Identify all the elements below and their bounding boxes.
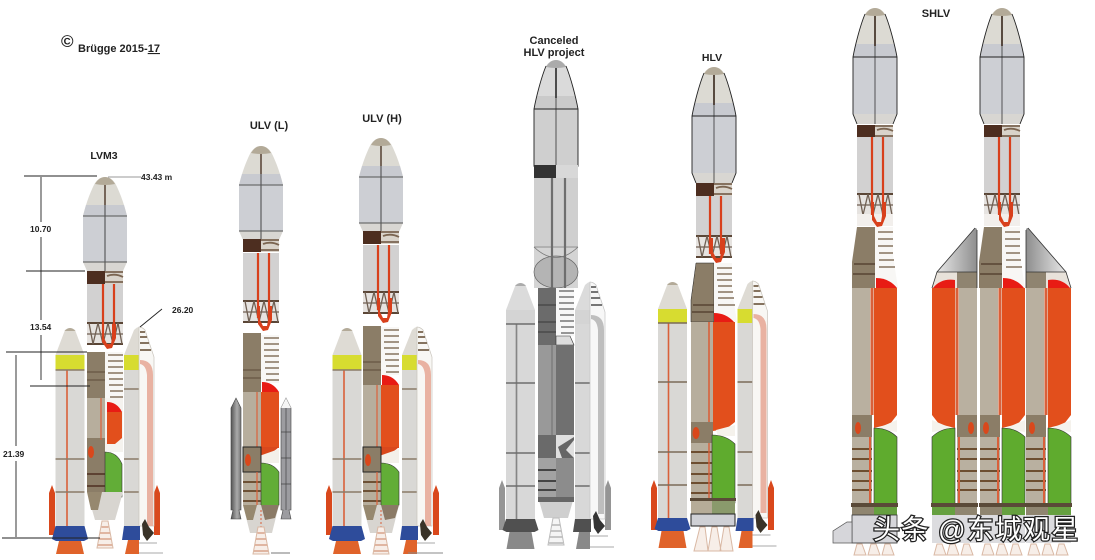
rocket: LVM3 xyxy=(2,150,194,554)
right strap-on nozzle xyxy=(768,480,774,530)
core stage xyxy=(239,146,283,554)
rocket: canceled HLV project xyxy=(499,35,614,549)
SHLV center core lower body xyxy=(979,288,1026,515)
SHLV left booster body xyxy=(931,288,978,543)
title: ULV (L): ULV (L) xyxy=(250,120,288,132)
SHLV right booster body xyxy=(1025,288,1072,515)
height leader xyxy=(108,176,141,178)
right booster cutaway xyxy=(736,281,776,548)
rocket: SHLV xyxy=(833,8,1072,555)
greyscale boosters and straps xyxy=(499,282,614,549)
right small solid strap-on xyxy=(281,398,291,519)
right booster cutaway xyxy=(122,327,163,554)
SHLV center base xyxy=(980,515,1025,543)
left booster xyxy=(52,328,88,554)
SHLV left booster nose xyxy=(932,228,977,288)
core stage xyxy=(83,177,127,548)
left small solid strap-on xyxy=(231,398,241,519)
dimension 10.70: 10.70 xyxy=(30,224,52,234)
left strap-on nozzle xyxy=(651,480,657,530)
SHLV center core xyxy=(979,8,1025,288)
title: Canceled HLV project xyxy=(524,35,585,59)
right strap-on nozzle xyxy=(433,485,439,535)
right strap-on nozzle xyxy=(154,485,160,535)
watermark: 头条 @东城观星 xyxy=(873,515,1080,545)
dimension lines xyxy=(2,176,162,538)
left strap-on nozzle xyxy=(49,485,55,535)
total height label: 43.43 m xyxy=(141,172,173,182)
title: ULV (H): ULV (H) xyxy=(362,113,402,125)
SHLV right base xyxy=(1026,515,1071,543)
core stage xyxy=(359,138,403,554)
SHLV booster nozzles xyxy=(934,544,1068,555)
left strap-on nozzle xyxy=(326,485,332,535)
rocket: ULV (L) xyxy=(231,120,291,554)
dimension 21.39: 21.39 xyxy=(3,449,25,459)
base line xyxy=(408,552,443,554)
rocket: HLV xyxy=(651,52,776,551)
dimension 26.20: 26.20 xyxy=(172,305,194,315)
copyright symbol: © xyxy=(61,32,74,51)
rocket: ULV (H) xyxy=(326,113,443,554)
credit text: Brügge 2015-17 xyxy=(78,43,160,55)
SHLV left core lower body xyxy=(851,288,898,515)
SHLV left core xyxy=(852,8,898,288)
title: HLV: HLV xyxy=(702,52,722,64)
SHLV left core nozzles xyxy=(854,544,894,555)
SHLV fin and base xyxy=(833,515,897,543)
core stage xyxy=(690,67,737,551)
title: LVM3: LVM3 xyxy=(90,150,118,162)
left booster xyxy=(329,328,365,554)
SHLV right booster nose xyxy=(1026,228,1071,288)
title: Canceled HLV project: Canceled xyxy=(530,35,578,47)
title: SHLV: SHLV xyxy=(922,8,951,20)
title: Canceled HLV project: HLV project xyxy=(524,47,585,59)
right booster cutaway xyxy=(400,327,441,554)
copyright credit xyxy=(61,32,160,55)
greyscale core stage xyxy=(534,60,578,545)
base line xyxy=(271,552,290,554)
dimension 13.54: 13.54 xyxy=(30,322,52,332)
left booster xyxy=(654,282,690,548)
